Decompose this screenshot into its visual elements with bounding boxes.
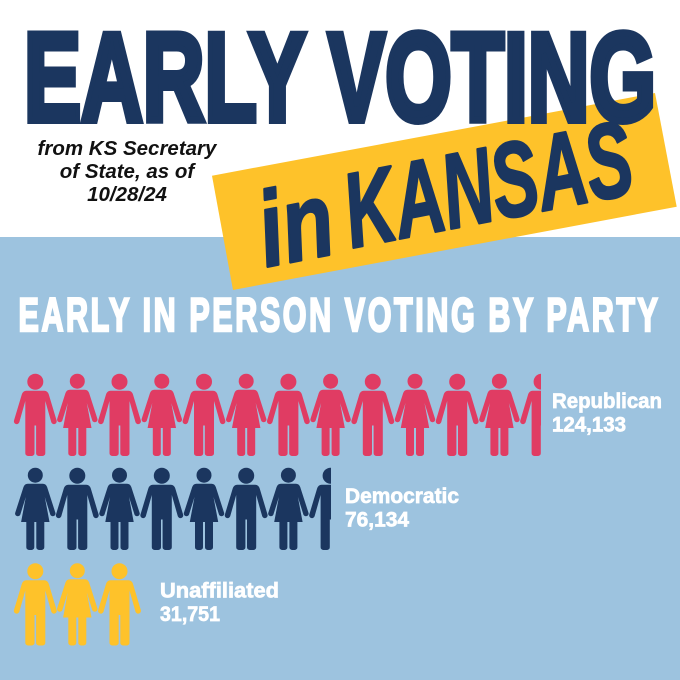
pictogram row: Unaffiliated bbox=[14, 563, 141, 646]
banner text: in KANSAS: in bbox=[248, 160, 343, 290]
subtitle: source and date: 10/28/24 bbox=[87, 183, 167, 206]
label: Democratic count: 76,134 bbox=[345, 508, 409, 532]
label: Republican count bbox=[552, 389, 662, 436]
background: white header bbox=[0, 0, 680, 237]
background: blue panel bbox=[0, 237, 680, 680]
label: Republican count: Republican bbox=[552, 389, 662, 413]
banner: yellow tilted bbox=[212, 93, 677, 290]
label: Unaffiliated count: 31,751 bbox=[160, 602, 220, 626]
subtitle: source and date: of State, as of bbox=[60, 160, 196, 183]
subtitle: source and date bbox=[38, 137, 218, 206]
label: Democratic count: Democratic bbox=[345, 484, 459, 508]
pictogram row: Democratic bbox=[15, 468, 352, 550]
label: Democratic count bbox=[345, 484, 459, 532]
label: Republican count: 124,133 bbox=[552, 412, 626, 436]
label: Unaffiliated count bbox=[160, 578, 279, 626]
pictogram row: Republican bbox=[14, 374, 563, 456]
subtitle: source and date: from KS Secretary bbox=[38, 137, 218, 160]
banner text: in KANSAS bbox=[248, 99, 642, 290]
label: Unaffiliated count: Unaffiliated bbox=[160, 578, 279, 602]
